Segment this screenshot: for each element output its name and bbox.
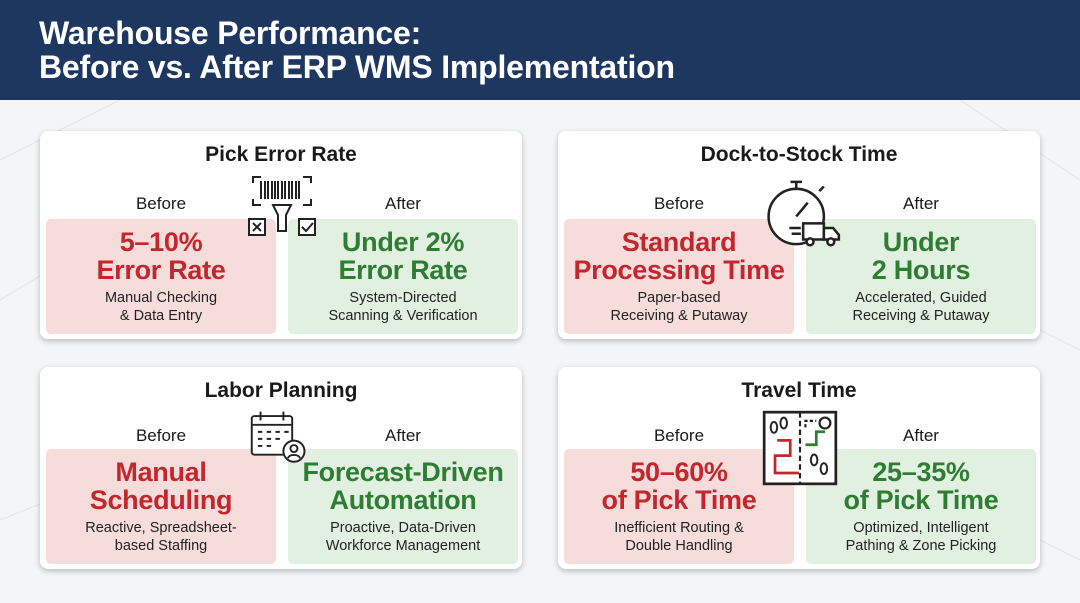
after label: After bbox=[903, 194, 939, 213]
after box: Under 2% bbox=[342, 227, 464, 257]
title bbox=[39, 15, 675, 85]
after box: Workforce Management bbox=[326, 538, 480, 554]
before box: Manual bbox=[115, 457, 207, 487]
after box: Receiving & Putaway bbox=[852, 308, 990, 324]
before box: Processing Time bbox=[573, 255, 785, 285]
before box: Reactive, Spreadsheet- bbox=[85, 520, 237, 536]
before label: Before bbox=[136, 426, 186, 445]
after box: 25–35% bbox=[872, 457, 970, 487]
before box: Manual Checking bbox=[105, 290, 217, 306]
before box bbox=[46, 449, 276, 564]
panel: pick error rate bbox=[40, 131, 522, 339]
after box bbox=[288, 219, 518, 334]
heading: Travel Time bbox=[741, 379, 857, 402]
before box: Error Rate bbox=[96, 255, 226, 285]
before box: based Staffing bbox=[115, 538, 207, 554]
after box bbox=[288, 449, 518, 564]
after box bbox=[806, 219, 1036, 334]
after box: Proactive, Data-Driven bbox=[330, 520, 476, 536]
panel: travel time bbox=[558, 367, 1040, 569]
icon: stopwatch truck bbox=[767, 180, 840, 246]
after box: Scanning & Verification bbox=[328, 308, 478, 324]
before box: Double Handling bbox=[625, 538, 733, 554]
panel: dock-to-stock bbox=[558, 131, 1040, 339]
before box bbox=[564, 219, 794, 334]
icon: barcode scanner bbox=[248, 176, 316, 236]
before box bbox=[46, 219, 276, 334]
heading: Dock-to-Stock Time bbox=[701, 143, 897, 166]
before box: of Pick Time bbox=[602, 485, 756, 515]
before box: & Data Entry bbox=[120, 308, 202, 324]
before box bbox=[564, 449, 794, 564]
title: Warehouse Performance: bbox=[39, 15, 421, 51]
icon: path map bbox=[762, 410, 838, 486]
before label: Before bbox=[654, 194, 704, 213]
before box: Scheduling bbox=[90, 485, 232, 515]
heading: Labor Planning bbox=[205, 379, 357, 402]
after box bbox=[806, 449, 1036, 564]
heading: Pick Error Rate bbox=[205, 143, 357, 166]
before box: Paper-based bbox=[637, 290, 721, 306]
after box: of Pick Time bbox=[844, 485, 998, 515]
after box: Automation bbox=[330, 485, 476, 515]
panel: labor planning bbox=[40, 367, 522, 569]
title: Before vs. After ERP WMS Implementation bbox=[39, 49, 675, 85]
icon: calendar gear bbox=[250, 412, 306, 463]
before box: Standard bbox=[622, 227, 736, 257]
before box: 5–10% bbox=[120, 227, 202, 257]
after box: Error Rate bbox=[338, 255, 468, 285]
after box: Accelerated, Guided bbox=[855, 290, 987, 306]
before box: Inefficient Routing & bbox=[614, 520, 744, 536]
after box: Forecast-Driven bbox=[302, 457, 504, 487]
after box: Pathing & Zone Picking bbox=[846, 538, 996, 554]
before box: 50–60% bbox=[630, 457, 728, 487]
before label: Before bbox=[136, 194, 186, 213]
after label: After bbox=[385, 426, 421, 445]
after box: System-Directed bbox=[349, 290, 457, 306]
after label: After bbox=[385, 194, 421, 213]
after box: Under bbox=[883, 227, 959, 257]
before label: Before bbox=[654, 426, 704, 445]
after box: 2 Hours bbox=[872, 255, 970, 285]
after box: Optimized, Intelligent bbox=[853, 520, 989, 536]
after label: After bbox=[903, 426, 939, 445]
before box: Receiving & Putaway bbox=[610, 308, 748, 324]
header bbox=[0, 0, 1080, 100]
